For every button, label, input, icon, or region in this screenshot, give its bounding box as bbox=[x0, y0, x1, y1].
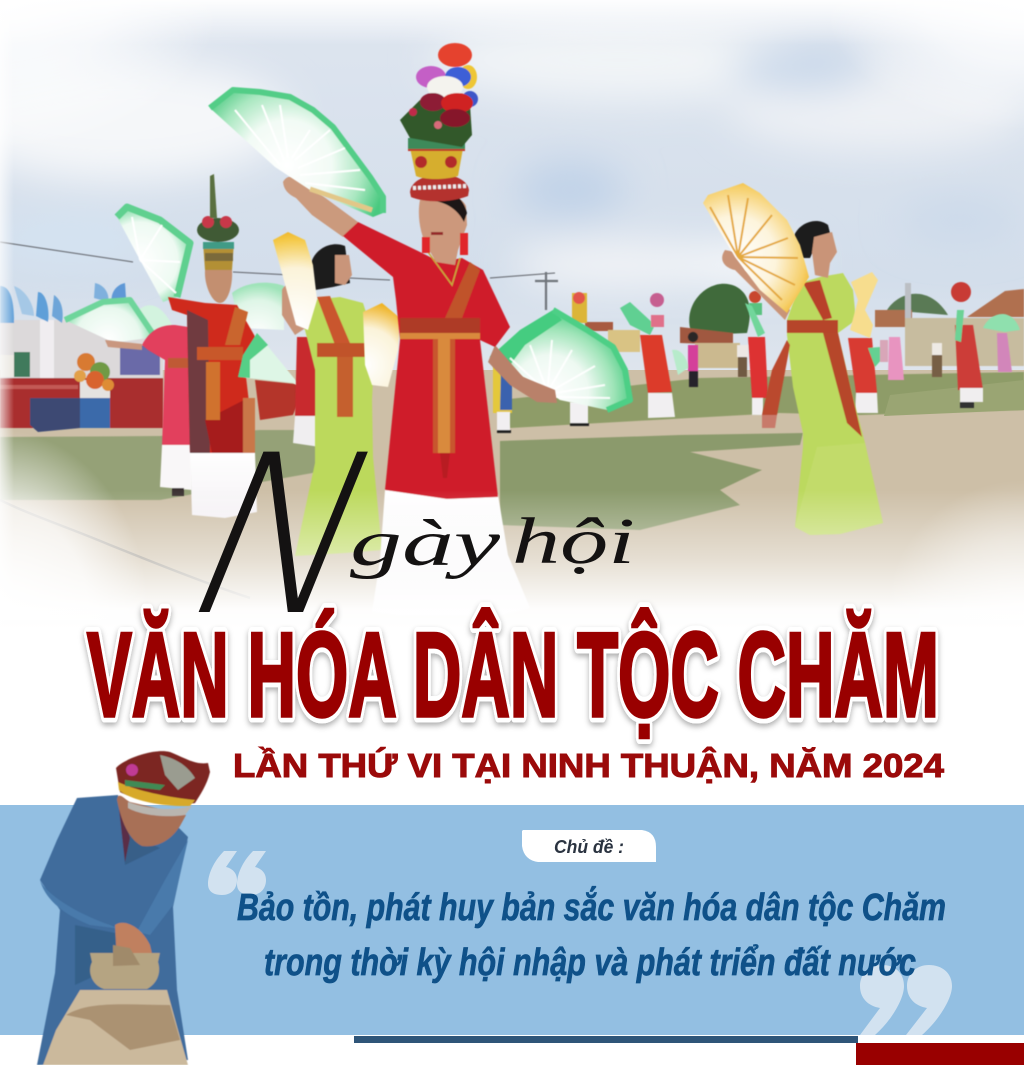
label: theme tag bbox=[522, 830, 656, 862]
lime dancer with black hair, left bbox=[282, 244, 382, 556]
small background dancers bbox=[493, 282, 1020, 433]
fan: yellow fan, right bbox=[703, 183, 809, 313]
raised arm bbox=[283, 176, 358, 237]
white skirt bbox=[374, 489, 526, 602]
lower arm bbox=[488, 345, 557, 403]
face and hair bbox=[117, 796, 186, 846]
small yellow fan, right bbox=[850, 272, 878, 338]
label: theme tag: Chủ đề : bbox=[554, 837, 624, 857]
photo ground bbox=[0, 370, 1024, 602]
photo sky with clouds bbox=[0, 0, 1024, 400]
background scenery: stage, trees, buildings bbox=[0, 242, 1024, 432]
dress bbox=[37, 795, 188, 1065]
fan: main green fan, right of main dancer bbox=[490, 310, 630, 410]
pot on head bbox=[410, 174, 469, 201]
icon: closing quote mark bbox=[860, 965, 952, 1035]
clay pedestal bbox=[43, 990, 188, 1065]
necklace bbox=[428, 252, 460, 285]
head bbox=[419, 194, 467, 265]
lime dancer, right bbox=[722, 221, 883, 535]
fan: front green fan of red dancer bbox=[237, 332, 296, 386]
fan: raised green fan bbox=[210, 90, 383, 217]
pink dancer, left bbox=[105, 325, 195, 496]
illustration: elderly Cham potter bbox=[37, 751, 210, 1065]
yellow fans, left bbox=[273, 232, 400, 387]
footer bar: red bbox=[856, 1043, 1024, 1065]
hands bbox=[115, 923, 153, 963]
heading: script title Ngày hội bbox=[151, 408, 635, 664]
clay pot bbox=[90, 953, 160, 989]
heading: script title Ngày hội: hội bbox=[512, 505, 635, 578]
panel: blue theme band bbox=[0, 805, 1024, 1035]
photo fade overlays bbox=[0, 0, 1024, 630]
sash bbox=[445, 262, 480, 318]
icon: opening quote mark bbox=[208, 851, 266, 895]
text: theme statement bbox=[237, 885, 946, 984]
heading: script title Ngày hội: gày bbox=[350, 507, 501, 580]
heading: script title Ngày hội: N bbox=[151, 408, 419, 664]
panel: festival photo bbox=[0, 0, 1024, 630]
red dress bbox=[343, 222, 510, 499]
fan: left green fans bbox=[65, 207, 284, 342]
footer bar: dark blue bbox=[354, 1036, 858, 1043]
main dancer bbox=[283, 43, 557, 616]
heading: subtitle: LẦN THỨ VI TẠI NINH THUẬN, NĂM 2024 bbox=[233, 747, 945, 784]
dancer in red with tall headdress bbox=[168, 174, 257, 518]
flowers bbox=[400, 100, 472, 147]
small figure behind lime dancer bbox=[292, 336, 316, 447]
turban bbox=[116, 751, 210, 805]
